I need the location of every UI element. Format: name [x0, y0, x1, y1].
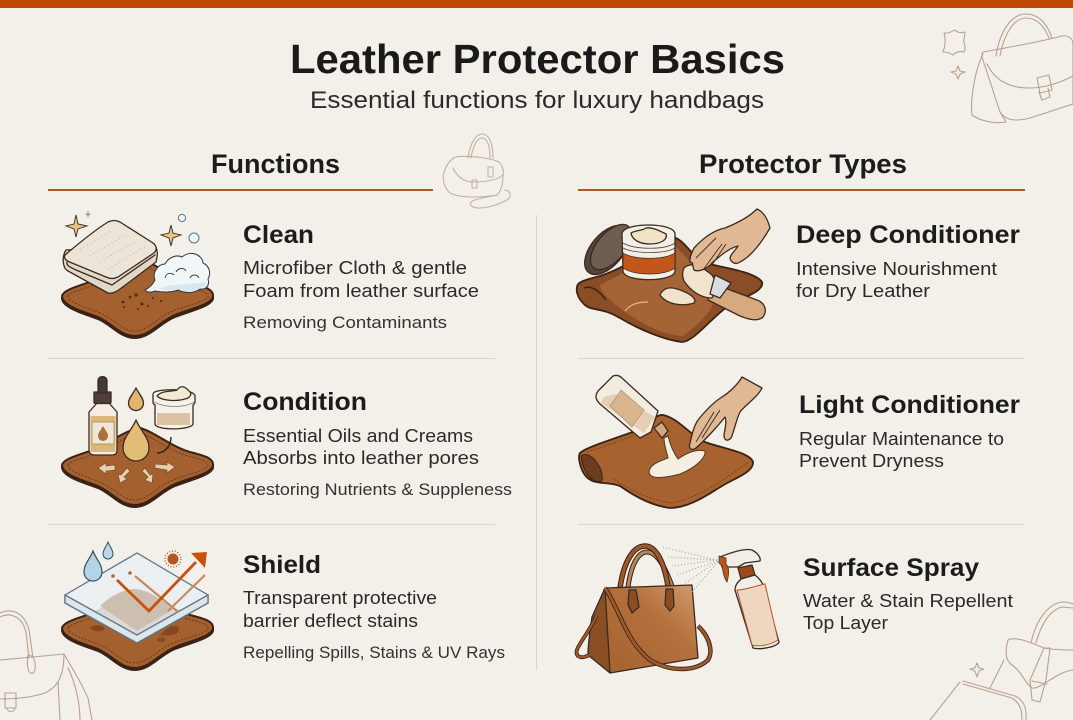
decorative handbag: bottom right: [930, 602, 1073, 720]
panel: deep conditioner: [576, 209, 1020, 342]
title: Leather Protector Basics: [290, 36, 785, 82]
panel: shield: [62, 542, 505, 670]
decorative handbag: bottom left: [0, 611, 92, 720]
text: shield: Transparent protective: [243, 588, 437, 608]
text: surface spray: Water & Stain Repellent: [803, 591, 1013, 611]
text: clean: [243, 221, 479, 332]
heading: protector types: Protector Types: [699, 149, 907, 179]
text: condition: Restoring Nutrients & Suppleness: [243, 481, 512, 499]
panel: surface spray: [576, 546, 1013, 673]
decorative handbag: top right: [943, 14, 1073, 123]
heading rule: protector types: [578, 189, 1025, 191]
text: deep conditioner: [796, 221, 1020, 301]
text: surface spray: [803, 554, 1013, 633]
text: condition: Condition: [243, 388, 367, 416]
text: clean: Microfiber Cloth & gentle: [243, 258, 467, 278]
text: surface spray: Surface Spray: [803, 554, 979, 582]
text: surface spray: Top Layer: [803, 613, 888, 633]
top accent bar: [0, 0, 1073, 8]
text: clean: Clean: [243, 221, 314, 249]
text: condition: Essential Oils and Creams: [243, 426, 473, 446]
text: clean: Removing Contaminants: [243, 314, 447, 332]
text: light conditioner: Light Conditioner: [799, 391, 1020, 419]
icon: cream jar, brush and hand on leather: [576, 209, 770, 342]
heading: functions: Functions: [211, 149, 340, 179]
text: shield: barrier deflect stains: [243, 611, 418, 631]
text: shield: Repelling Spills, Stains & UV Rays: [243, 644, 505, 662]
text: shield: Shield: [243, 551, 321, 579]
text: condition: Absorbs into leather pores: [243, 448, 479, 468]
text: shield: [243, 551, 505, 662]
subtitle: Essential functions for luxury handbags: [310, 87, 764, 114]
text: deep conditioner: Intensive Nourishment: [796, 259, 997, 279]
icon: lotion bottle and hand on leather: [579, 375, 762, 508]
icon: handbag and spray bottle: [576, 546, 779, 673]
decorative handbag: section heading: [443, 134, 510, 208]
text: light conditioner: Regular Maintenance to: [799, 429, 1004, 449]
text: deep conditioner: Deep Conditioner: [796, 221, 1020, 249]
text: clean: Foam from leather surface: [243, 281, 479, 301]
text: light conditioner: [799, 391, 1020, 471]
icon: oil bottle, drops and cream: [62, 376, 213, 507]
text: light conditioner: Prevent Dryness: [799, 451, 944, 471]
text: condition: [243, 388, 512, 499]
icon: glass barrier over leather: [62, 542, 213, 670]
panel: clean: [62, 210, 479, 338]
panel: light conditioner: [579, 375, 1020, 508]
text: deep conditioner: for Dry Leather: [796, 281, 930, 301]
icon: cloth and foam on leather: [62, 210, 213, 338]
panel: condition: [62, 376, 512, 507]
heading rule: functions: [48, 189, 433, 191]
